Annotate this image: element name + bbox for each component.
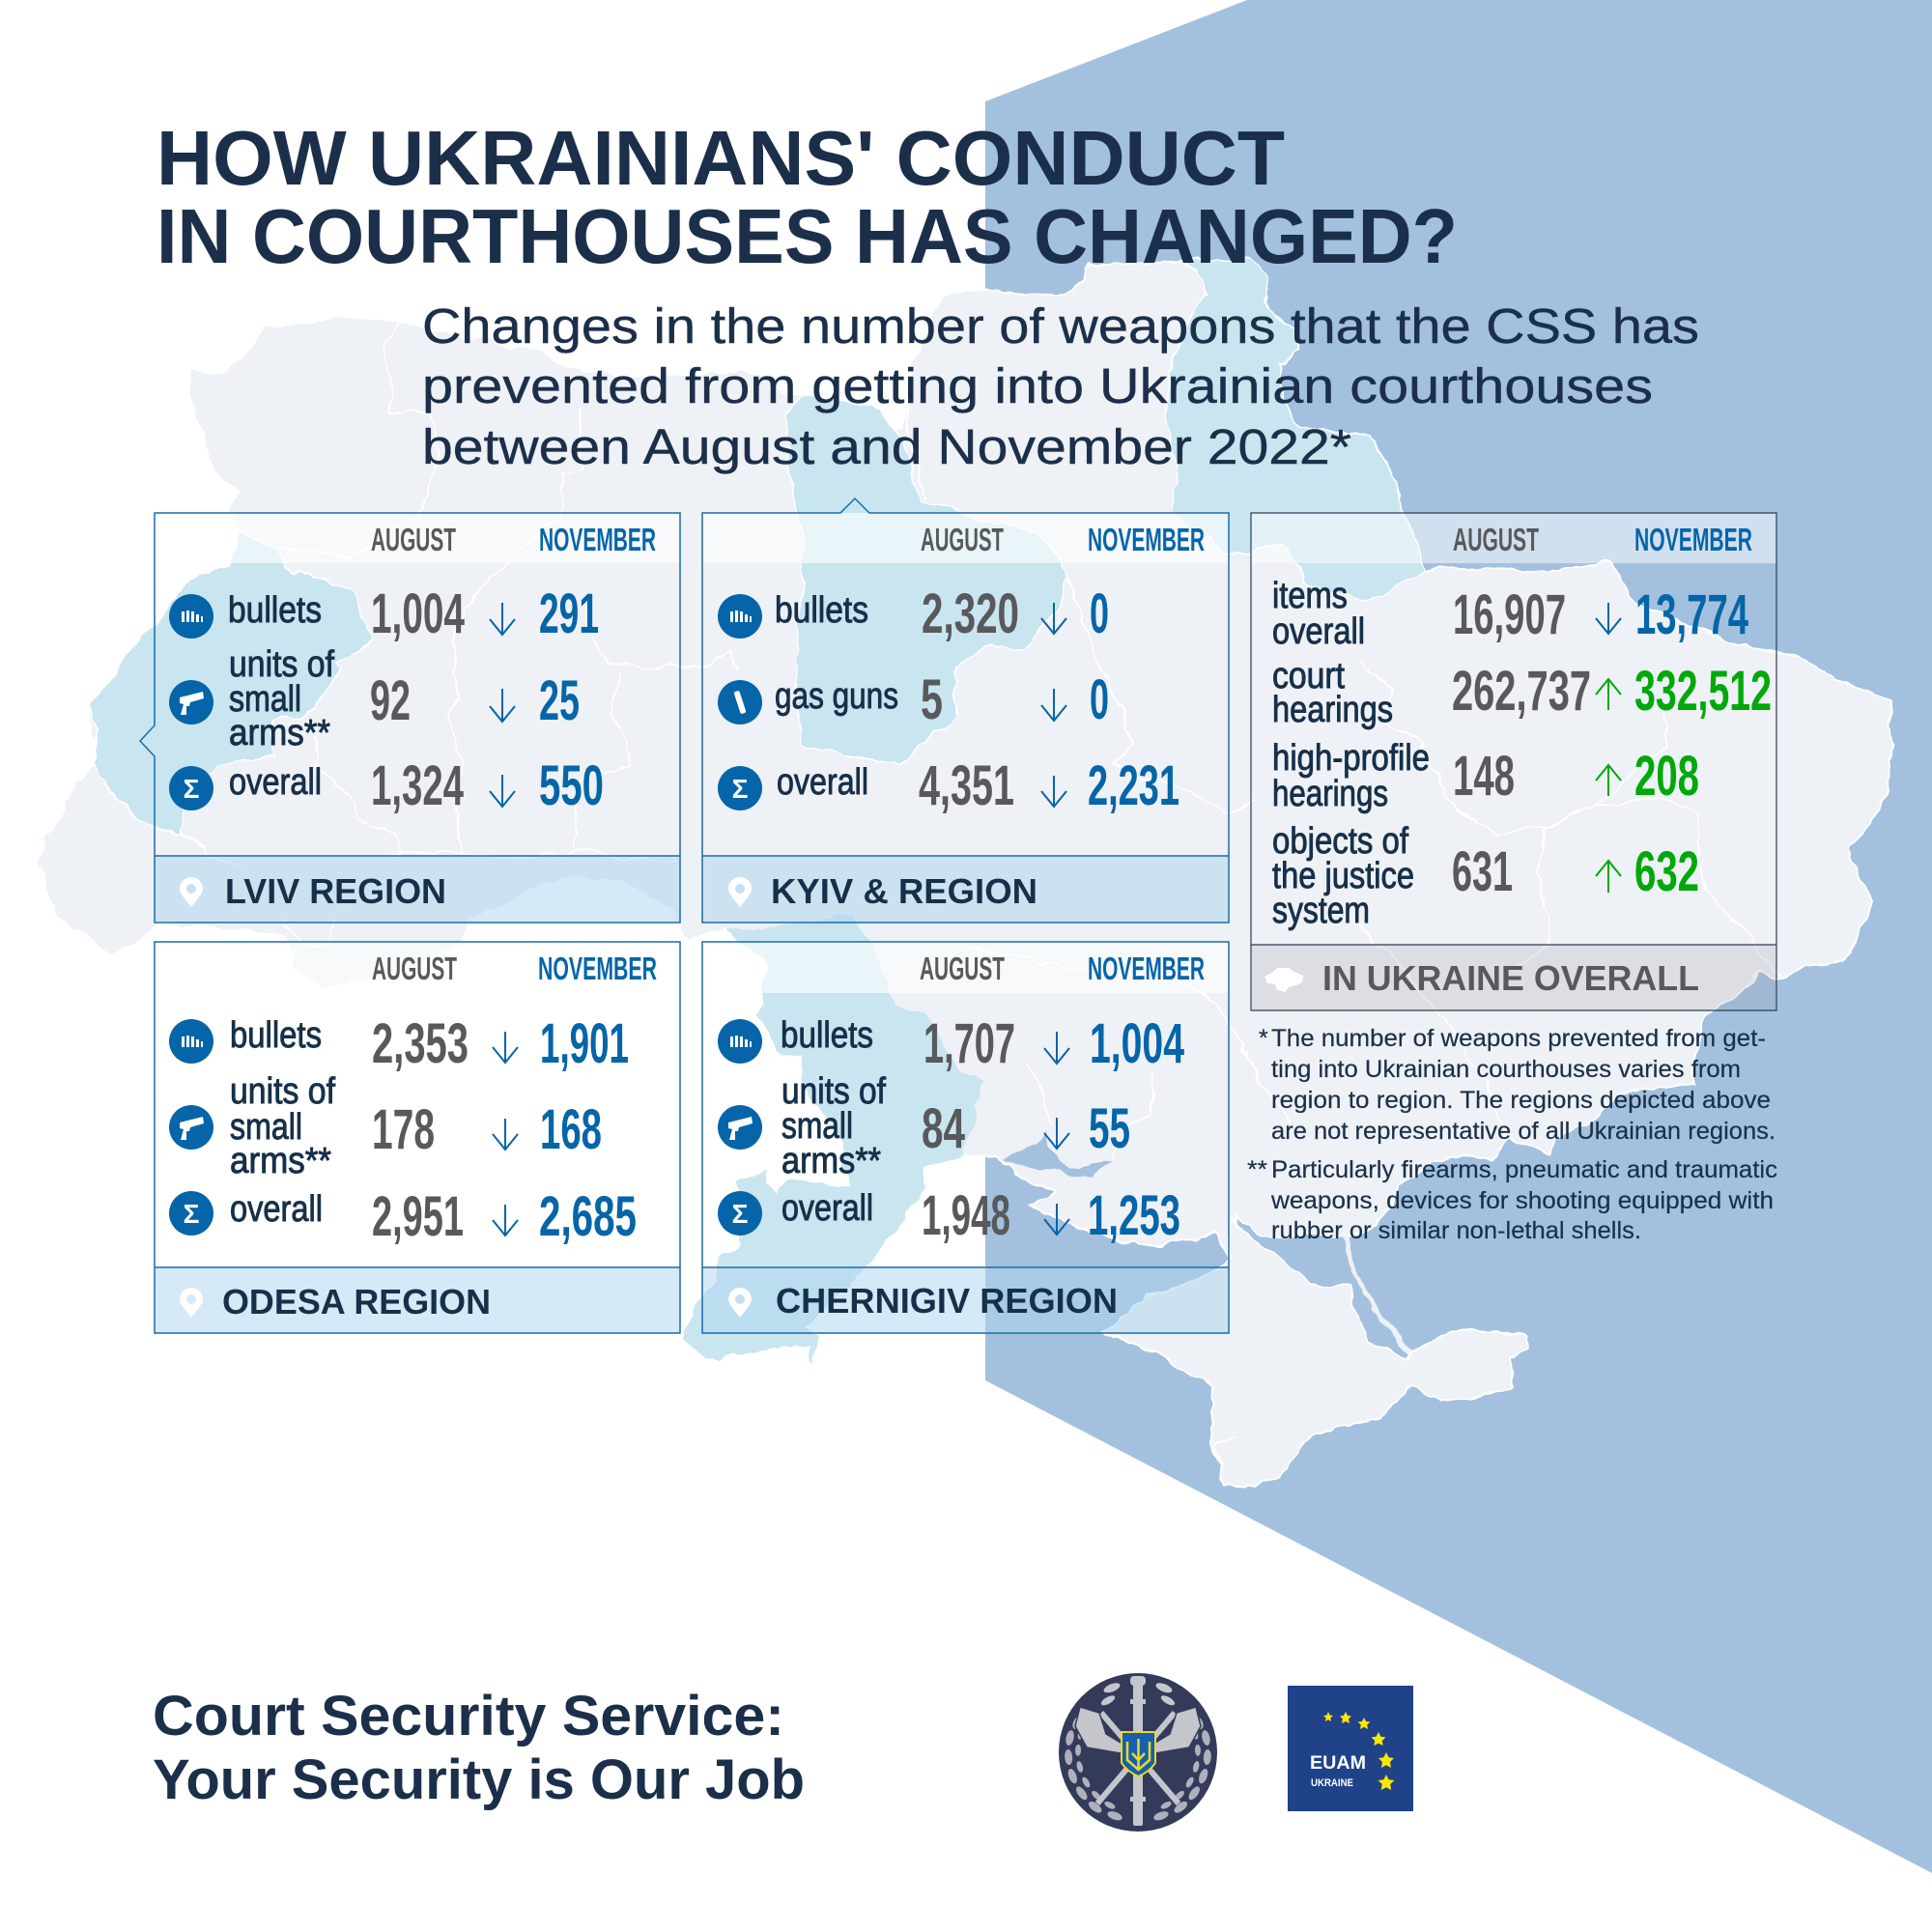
panel: Odesa region: 168 (540, 1098, 602, 1161)
panel: Lviv region: 92 (370, 669, 411, 732)
panel: in Ukraine overall: 16,907 (1453, 583, 1566, 646)
panel: Lviv region (140, 513, 680, 923)
panel: Chernihiv region (702, 942, 1229, 1333)
panel: in Ukraine overall: 631 (1452, 840, 1513, 903)
panel: Lviv region: small (229, 679, 301, 720)
subtitle: between August and November 2022* (422, 419, 1351, 474)
panel: Lviv region: units of (229, 644, 334, 685)
icon: sigma (169, 1191, 213, 1236)
icon: bullets (718, 594, 762, 639)
panel: in Ukraine overall: the justice (1272, 856, 1414, 896)
footnotes: rubber or similar non-lethal shells. (1271, 1217, 1641, 1244)
panel: Chernihiv region: arms** (781, 1141, 881, 1181)
panel: Odesa region: 2,353 (372, 1012, 469, 1075)
panel: Chernihiv region: NOVEMBER (1088, 951, 1205, 986)
panel: Odesa region: arms** (230, 1141, 331, 1181)
panel: in Ukraine overall: high-profile (1272, 738, 1430, 779)
footnotes: The number of weapons prevented from get- (1271, 1025, 1766, 1052)
title: HOW UKRAINIANS' CONDUCT (156, 115, 1285, 201)
icon: sigma (718, 766, 762, 810)
map: Kyiv region (784, 393, 1067, 763)
footnotes: are not representative of all Ukrainian regions. (1271, 1118, 1776, 1145)
panel: in Ukraine overall: court (1272, 656, 1345, 696)
panel: in Ukraine overall: 13,774 (1635, 583, 1748, 646)
panel: Chernihiv region: overall (781, 1188, 873, 1229)
panel: Kyiv and region: 0 (1090, 582, 1109, 645)
icon: sigma (718, 1191, 762, 1236)
background blue shape (985, 0, 1932, 1873)
icon: pin (728, 1288, 752, 1318)
map of Ukraine (37, 261, 1896, 1488)
panel: Chernihiv region: 1,004 (1090, 1012, 1184, 1075)
icon: sigma: Σ (732, 774, 748, 804)
panel: Lviv region: NOVEMBER (539, 522, 656, 557)
logo: Court Security Service emblem (1059, 1673, 1217, 1832)
icon: pistol (169, 1105, 213, 1150)
icon: bullets (718, 1019, 762, 1064)
panel: Kyiv and region: overall (777, 762, 868, 803)
panel: Kyiv and region: 2,320 (922, 582, 1019, 645)
subtitle: prevented from getting into Ukrainian courthouses (422, 358, 1653, 413)
footnotes: Particularly firearms, pneumatic and traumatic (1271, 1156, 1777, 1183)
panel: Kyiv and region: 2,231 (1088, 754, 1179, 817)
logo: EUAM Ukraine: EUAM (1310, 1753, 1366, 1774)
panel: Lviv region: arms** (229, 713, 330, 753)
panel: Lviv region: LVIV REGION (225, 871, 446, 911)
slogan (153, 1685, 805, 1811)
map: Dnipro estuary (1002, 1130, 1113, 1179)
panel: Odesa region (155, 942, 680, 1333)
title: IN COURTHOUSES HAS CHANGED? (156, 193, 1458, 279)
icon: sigma: Σ (732, 1199, 748, 1229)
panel: in Ukraine overall: AUGUST (1453, 522, 1539, 557)
panel: Lviv region: 1,004 (371, 582, 465, 645)
footnotes: ** (1247, 1156, 1267, 1183)
icon: Ukraine map (1264, 968, 1303, 992)
panel: in Ukraine overall: objects of (1272, 821, 1408, 862)
panel: in Ukraine overall: system (1272, 891, 1370, 931)
icon: bullets (169, 594, 213, 639)
icon: sigma (169, 766, 213, 810)
panel: Odesa region: 178 (372, 1098, 435, 1161)
panel: Lviv region: 25 (539, 669, 580, 732)
map: Lviv region (89, 532, 375, 834)
logo: EUAM Ukraine (1288, 1686, 1413, 1811)
icon: pin (728, 877, 752, 907)
panel: Kyiv and region (702, 498, 1229, 923)
icon: pistol (718, 1105, 762, 1150)
panel: Odesa region: bullets (230, 1015, 322, 1056)
panel: Odesa region: 1,901 (540, 1012, 629, 1075)
panel: Chernihiv region: 84 (922, 1097, 965, 1160)
panel: Chernihiv region: 1,948 (922, 1184, 1010, 1247)
panel: in Ukraine overall: IN UKRAINE OVERALL (1322, 958, 1699, 998)
footnotes: weapons, devices for shooting equipped with (1270, 1187, 1774, 1214)
panel: Lviv region: 1,324 (371, 754, 464, 817)
panel: Odesa region: small (230, 1107, 302, 1148)
panel: Odesa region: 2,685 (539, 1185, 637, 1248)
subtitle (422, 298, 1699, 474)
panel: Kyiv and region: 0 (1090, 668, 1109, 731)
panel: Odesa region: units of (230, 1071, 335, 1112)
footnotes: * (1259, 1025, 1268, 1052)
icon: sigma: Σ (184, 1199, 199, 1229)
title (156, 115, 1458, 279)
panel: in Ukraine overall: items (1272, 576, 1348, 616)
panel: Kyiv and region: 5 (921, 668, 943, 731)
subtitle: Changes in the number of weapons that the CSS has (422, 298, 1699, 354)
panel: Odesa region: ODESA REGION (222, 1282, 491, 1321)
map: Chernihiv region (1164, 261, 1425, 603)
slogan: Court Security Service: (153, 1685, 784, 1747)
panel: Lviv region: 291 (539, 582, 599, 645)
panel: Chernihiv region: CHERNIGIV REGION (776, 1281, 1118, 1321)
panel: Lviv region: 550 (539, 754, 604, 817)
icon: pin (180, 1288, 203, 1318)
slogan: Your Security is Our Job (153, 1748, 805, 1811)
panel: in Ukraine overall: 148 (1453, 745, 1515, 808)
panel: Chernihiv region: 1,707 (923, 1012, 1015, 1075)
panel: in Ukraine overall: overall (1272, 611, 1365, 652)
panel: Kyiv and region: gas guns (775, 676, 898, 717)
panel: in Ukraine overall: NOVEMBER (1634, 522, 1752, 557)
panel: in Ukraine overall: hearings (1272, 690, 1393, 730)
map: Crimea (1101, 1219, 1531, 1488)
panel: Lviv region: bullets (228, 590, 322, 631)
panel: Kyiv and region: KYIV & REGION (771, 871, 1037, 911)
panel: in Ukraine overall: 262,737 (1452, 660, 1591, 723)
panel: Lviv region: overall (229, 762, 322, 803)
panel: Lviv region: AUGUST (371, 522, 456, 557)
panel: in Ukraine overall: 208 (1634, 745, 1699, 808)
panel: Kyiv and region: AUGUST (921, 522, 1004, 557)
map: Arabat spit (1346, 1236, 1410, 1354)
map: Odesa region (684, 915, 980, 1365)
panel: Chernihiv region: bullets (781, 1015, 873, 1056)
icon: sigma: Σ (184, 774, 199, 804)
panel: in Ukraine overall (1251, 513, 1776, 1010)
panel: in Ukraine overall: 332,512 (1634, 660, 1772, 723)
footnotes: region to region. The regions depicted above (1271, 1087, 1771, 1114)
panel: Kyiv and region: 4,351 (919, 754, 1014, 817)
panel: Chernihiv region: small (781, 1106, 853, 1147)
panel: in Ukraine overall: 632 (1634, 840, 1699, 903)
panel: Odesa region: NOVEMBER (538, 951, 657, 986)
panel: Odesa region: overall (230, 1189, 323, 1230)
logo: EUAM Ukraine: UKRAINE (1311, 1777, 1353, 1789)
map: region borders (179, 322, 1779, 1486)
panel: in Ukraine overall: hearings (1272, 774, 1388, 814)
panel: Chernihiv region: units of (781, 1071, 886, 1112)
panel: Chernihiv region: 55 (1089, 1097, 1130, 1160)
panel: Odesa region: AUGUST (372, 951, 457, 986)
icon: pin (180, 877, 203, 907)
footnotes: ting into Ukrainian courthouses varies from (1271, 1056, 1741, 1083)
icon: bullets (169, 1019, 213, 1064)
icon: pistol (169, 680, 213, 724)
footnotes (1247, 1025, 1777, 1244)
panel: Kyiv and region: NOVEMBER (1088, 522, 1205, 557)
icon: gas gun (718, 680, 762, 724)
panel: Chernihiv region: AUGUST (920, 951, 1005, 986)
map: mainland (37, 261, 1896, 1272)
panel: Chernihiv region: 1,253 (1088, 1184, 1180, 1247)
panel: Kyiv and region: bullets (775, 590, 868, 631)
panel: Odesa region: 2,951 (372, 1185, 464, 1248)
